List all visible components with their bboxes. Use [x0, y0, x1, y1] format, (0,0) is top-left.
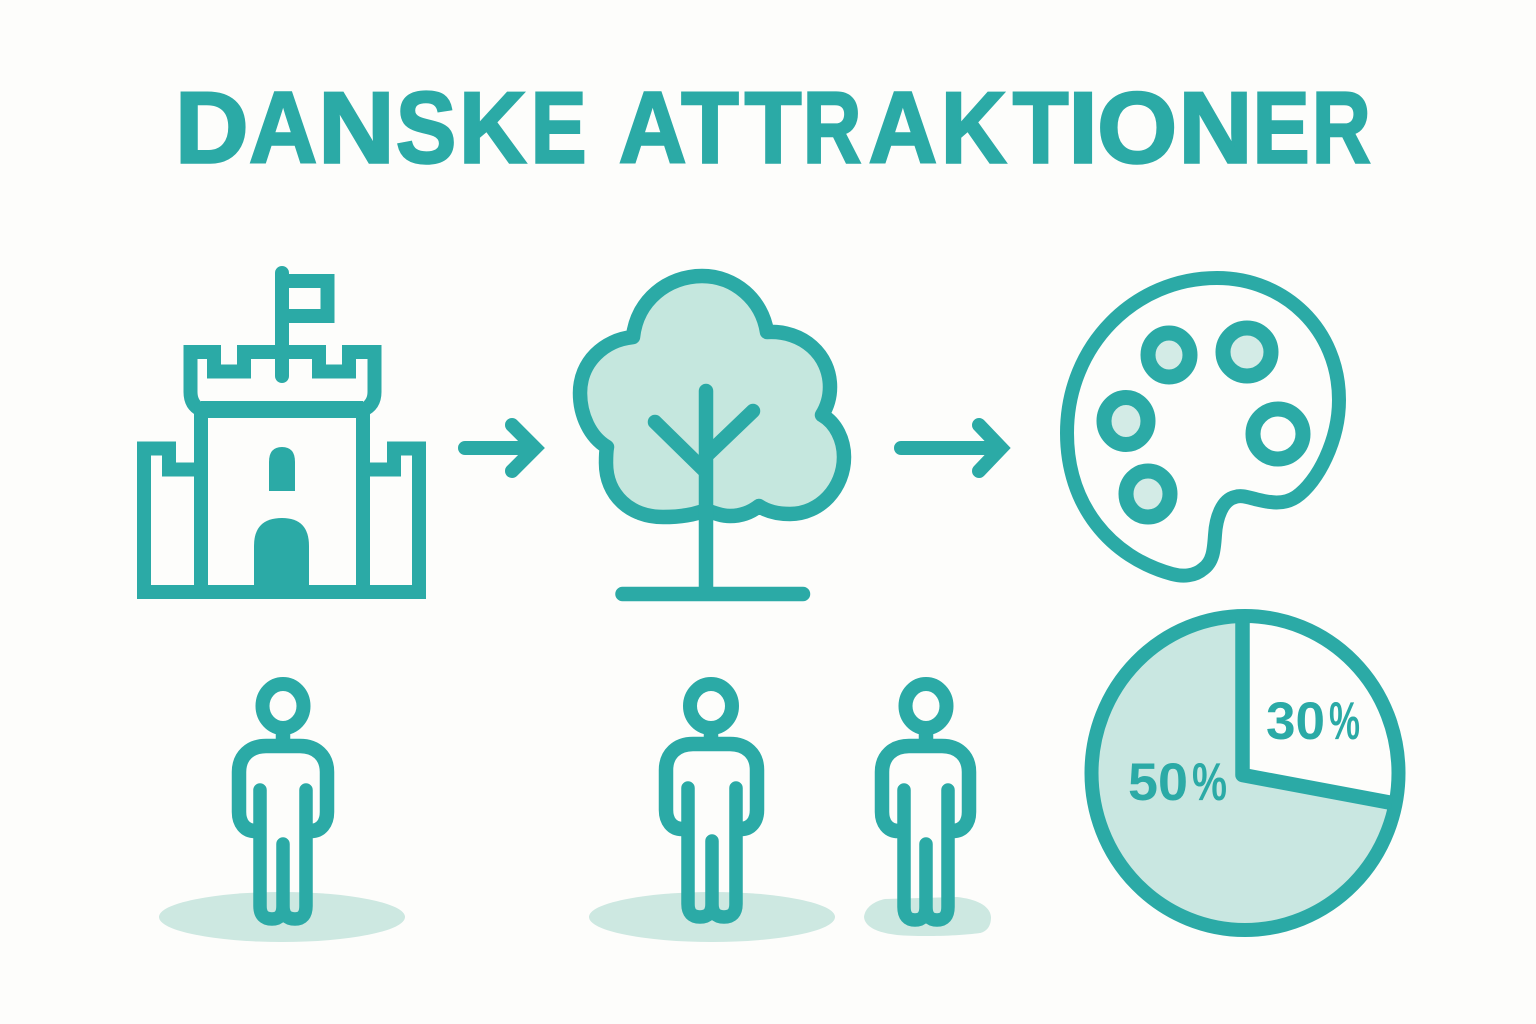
label: 30%: 30	[1266, 692, 1325, 751]
icon: tree	[580, 276, 844, 594]
ground shadows	[159, 892, 991, 942]
title: A	[249, 72, 317, 184]
title: K	[459, 72, 526, 184]
arrow: tree to palette	[901, 425, 1001, 471]
icon: palette	[1067, 278, 1339, 576]
title: K	[941, 72, 1006, 184]
icon: castle	[144, 273, 419, 592]
title: R	[1312, 72, 1371, 184]
label: 30%: %	[1329, 692, 1360, 751]
title: N	[1178, 72, 1252, 184]
palette paint wells	[1104, 328, 1303, 517]
pie slice: 30%	[1243, 616, 1398, 803]
title: A	[868, 72, 937, 184]
title: T	[681, 72, 739, 184]
label: 50%: %	[1192, 753, 1227, 812]
title: E	[531, 72, 586, 184]
title: O	[1097, 72, 1177, 184]
title: E	[1253, 72, 1310, 184]
title: A	[619, 72, 687, 184]
title: T	[745, 72, 802, 184]
person 3	[882, 684, 969, 920]
title: D	[175, 72, 249, 184]
arrow: castle to tree	[465, 425, 535, 471]
title: R	[803, 72, 861, 184]
title: T	[1013, 72, 1068, 184]
title: N	[318, 72, 395, 184]
person 2	[666, 684, 757, 917]
title: S	[396, 72, 456, 184]
person 1	[239, 684, 327, 919]
pie chart	[1092, 616, 1398, 930]
title: I	[1068, 72, 1098, 184]
label: 50%: 50	[1128, 753, 1188, 812]
